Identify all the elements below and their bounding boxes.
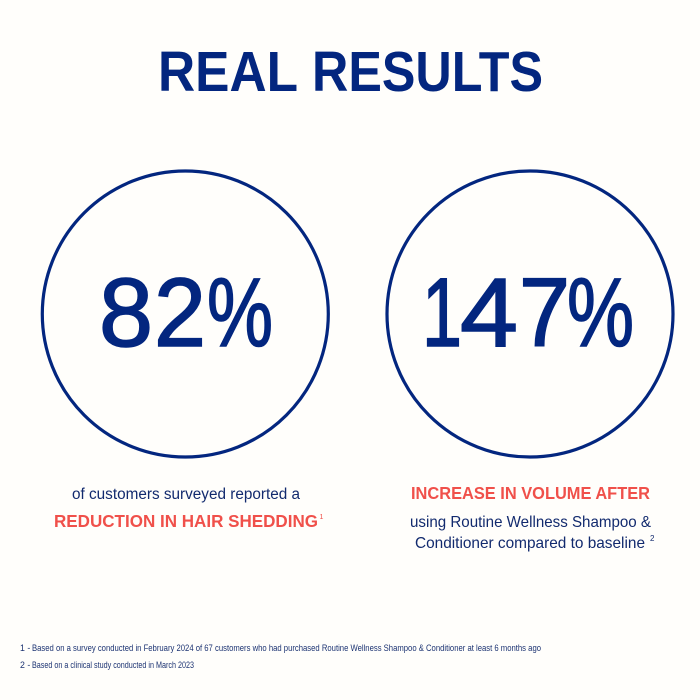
caption: increase in volume [410, 483, 655, 552]
stat value: 82%: % [207, 258, 273, 367]
caption: reduction in hair shedding: of customers surveyed reported a [72, 486, 300, 503]
stat value: 147%: 4 [460, 258, 518, 367]
caption: increase in volume: 2 [650, 534, 655, 543]
caption: reduction in hair shedding: 1 [320, 514, 324, 521]
footnote 2: 2 - [20, 660, 30, 670]
stat circle: 82% [42, 171, 328, 457]
caption: increase in volume: INCREASE IN VOLUME AFTER [411, 483, 650, 503]
caption: reduction in hair shedding [54, 486, 324, 531]
caption: increase in volume: using Routine Wellness Shampoo & [410, 514, 651, 531]
footnote 1: 1 - [20, 643, 30, 653]
footnote 1: Based on a survey conducted in February 2024 of 67 customers who had purchased Routine Wellness Shampoo & Conditioner at least 6 months ago [32, 643, 541, 653]
stat circle: 147% [387, 171, 673, 457]
stat value: 82%: 2 [154, 258, 206, 367]
panel: 82% stat [42, 171, 328, 457]
stat value: 147%: 7 [519, 258, 570, 367]
footnote 2: Based on a clinical study conducted in March 2023 [32, 660, 194, 670]
stat value: 82% [99, 258, 273, 367]
stat value: 147%: % [567, 258, 634, 367]
caption: increase in volume: Conditioner compared to baseline [415, 535, 645, 552]
title: REAL [158, 40, 298, 104]
stat value: 147%: 1 [422, 258, 462, 367]
caption: reduction in hair shedding: REDUCTION IN HAIR SHEDDING [54, 511, 318, 531]
stat value: 147% [422, 258, 634, 367]
title: RESULTS [312, 40, 543, 104]
stat value: 82%: 8 [99, 258, 153, 367]
panel: 147% stat [387, 171, 673, 457]
title [158, 40, 543, 104]
